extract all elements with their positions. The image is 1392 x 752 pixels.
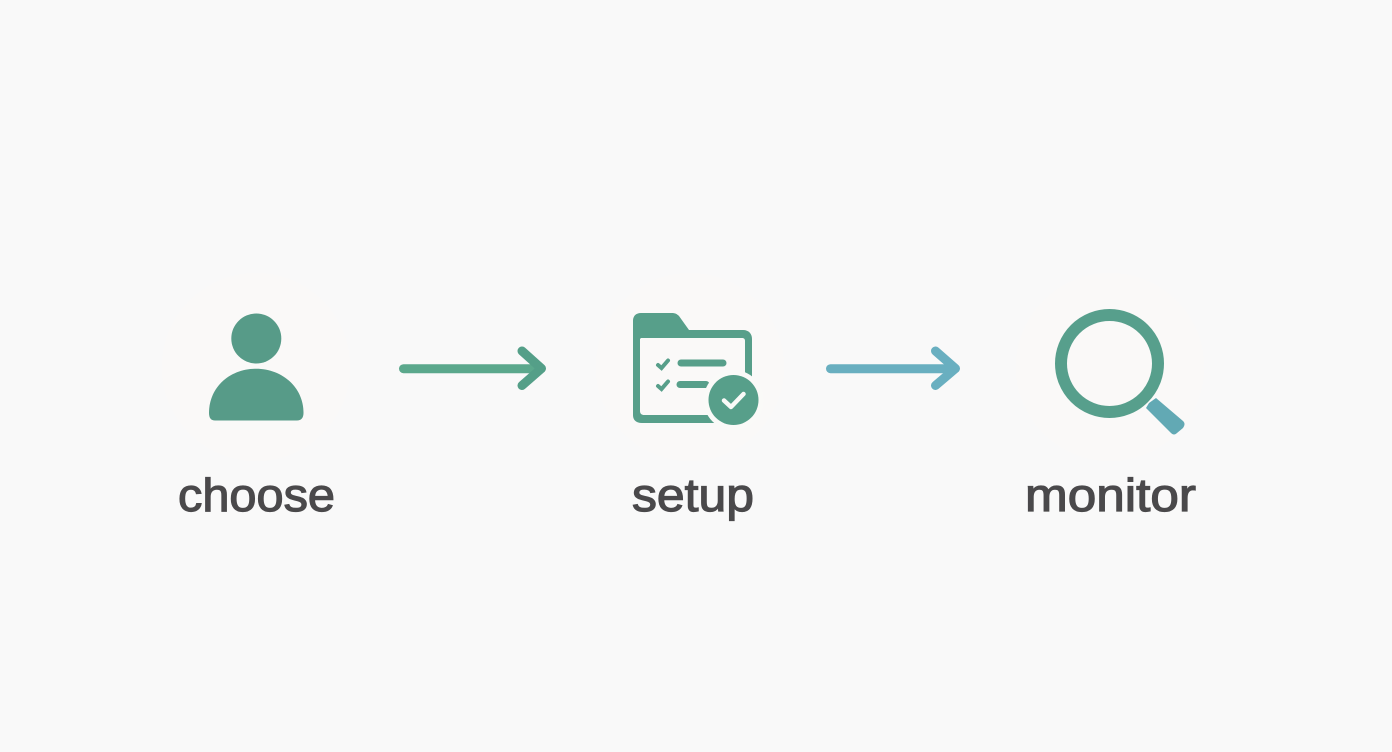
icon: magnifying glass	[1061, 315, 1184, 434]
checklist lines	[658, 360, 723, 389]
icon: person	[209, 314, 304, 420]
check badge	[704, 370, 764, 430]
label: monitor: monitor	[1025, 469, 1196, 521]
icon backdrop: choose	[162, 273, 350, 461]
label: setup: setup	[632, 469, 754, 521]
label: choose: choose	[178, 469, 335, 521]
step: monitor	[1016, 273, 1204, 521]
arrow: choose to setup	[404, 351, 542, 386]
icon backdrop: monitor	[1016, 273, 1204, 461]
step: choose	[162, 273, 350, 521]
icon: folder with checklist	[633, 313, 764, 430]
folder	[633, 313, 752, 423]
step: setup	[596, 273, 784, 521]
icon backdrop: setup	[596, 273, 784, 461]
arrow: setup to monitor	[830, 351, 956, 386]
